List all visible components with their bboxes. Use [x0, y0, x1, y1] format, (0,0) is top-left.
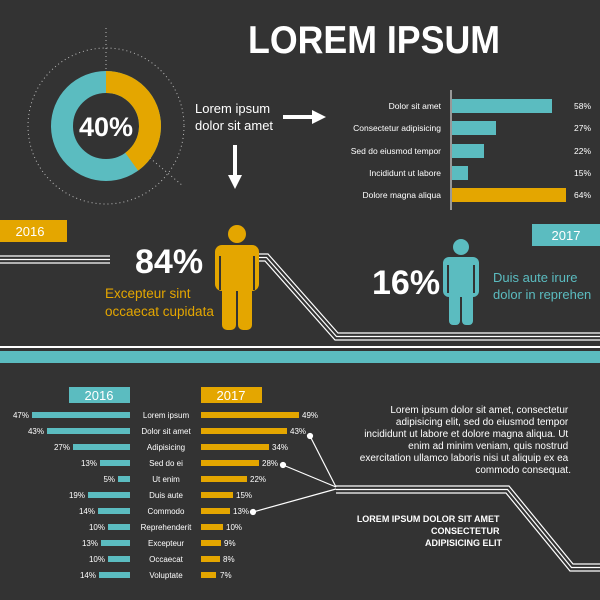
text: excepteur: Excepteur sint — [105, 286, 191, 301]
text: excepteur: occaecat cupidata — [105, 304, 214, 319]
comparison bar chart: Adipisicing — [147, 443, 185, 452]
bottom header 2016: 2016 — [85, 388, 113, 403]
divider band — [0, 346, 600, 348]
bottom header 2017 — [201, 387, 262, 403]
title: LOREM IPSUM — [248, 19, 500, 62]
comparison bar chart: 22% — [250, 475, 266, 484]
connector lines bottom — [336, 486, 600, 571]
comparison bar chart: 13% — [82, 539, 98, 548]
comparison bar chart: Commodo — [148, 507, 185, 516]
comparison bar chart: 9% — [224, 539, 236, 548]
top bar chart: Sed do eiusmod tempor — [351, 146, 441, 156]
bold caption: ADIPISICING ELIT — [425, 538, 502, 548]
comparison bar chart: Sed do ei — [149, 459, 183, 468]
tag 2016: 2016 — [16, 224, 44, 239]
comparison bar chart: Dolor sit amet — [141, 427, 191, 436]
icon: teal person — [443, 239, 479, 325]
comparison bar chart: 34% — [272, 443, 288, 452]
top bar chart: 22% — [574, 146, 591, 156]
top bar chart — [351, 90, 591, 210]
comparison bar chart: 7% — [220, 571, 232, 580]
comparison bar chart: 14% — [79, 507, 95, 516]
comparison bar chart: 14% — [80, 571, 96, 580]
text: duis aute: Duis aute irure — [493, 270, 578, 285]
donut chart 40%: 40% — [79, 112, 133, 142]
top bar chart: Consectetur adipisicing — [353, 123, 441, 133]
tag 2016 — [0, 220, 67, 242]
connector lines middle — [0, 254, 600, 340]
comparison bar chart: 8% — [223, 555, 235, 564]
comparison bar chart: 43% — [28, 427, 44, 436]
comparison bar chart: 13% — [233, 507, 249, 516]
arrow down — [228, 145, 242, 189]
tag 2017 — [532, 224, 600, 246]
text: lorem ipsum dolor: Lorem ipsum — [195, 101, 270, 116]
comparison bar chart: Occaecat — [149, 555, 184, 564]
tag 2017: 2017 — [552, 228, 580, 243]
stat 16%: 16% — [372, 264, 440, 302]
comparison bar chart: Reprehenderit — [141, 523, 192, 532]
top bar chart: Dolore magna aliqua — [363, 190, 441, 200]
donut chart 40% — [28, 28, 184, 204]
comparison bar chart: 47% — [13, 411, 29, 420]
stat 84%: 84% — [135, 243, 203, 281]
paragraph: incididunt ut labore et dolore magna aliqua. Ut — [364, 429, 568, 440]
top bar chart: Incididunt ut labore — [369, 168, 441, 178]
top bar chart: Dolor sit amet — [389, 101, 442, 111]
bottom header 2017: 2017 — [217, 388, 245, 403]
icon: orange person — [215, 225, 259, 330]
top bar chart: 58% — [574, 101, 591, 111]
comparison bar chart: Ut enim — [152, 475, 180, 484]
comparison bar chart: Lorem ipsum — [143, 411, 189, 420]
pointer lines — [250, 434, 336, 514]
comparison bar chart: 49% — [302, 411, 318, 420]
comparison bar chart: 43% — [290, 427, 306, 436]
comparison bar chart: Excepteur — [148, 539, 184, 548]
bold caption: LOREM IPSUM DOLOR SIT AMET — [357, 514, 500, 524]
bottom header 2016 — [69, 387, 130, 403]
paragraph: enim ad minim veniam, quis nostrud — [408, 441, 568, 452]
bold caption: CONSECTETUR — [431, 526, 500, 536]
text: duis aute: dolor in reprehen — [493, 287, 591, 302]
comparison bar chart: 10% — [89, 523, 105, 532]
paragraph: exercitation ullamco laboris nisi ut aliquip ex ea — [360, 453, 569, 464]
comparison bar chart: 28% — [262, 459, 278, 468]
text: lorem ipsum dolor: dolor sit amet — [195, 118, 273, 133]
comparison bar chart: 27% — [54, 443, 70, 452]
paragraph: Lorem ipsum dolor sit amet, consectetur — [390, 405, 569, 416]
comparison bar chart: 10% — [226, 523, 242, 532]
top bar chart: 64% — [574, 190, 591, 200]
comparison bar chart: 19% — [69, 491, 85, 500]
comparison bar chart: Voluptate — [149, 571, 183, 580]
comparison bar chart — [13, 411, 318, 580]
paragraph: adipisicing elit, sed do eiusmod tempor — [396, 417, 569, 428]
comparison bar chart: 15% — [236, 491, 252, 500]
comparison bar chart: 10% — [89, 555, 105, 564]
top bar chart: 27% — [574, 123, 591, 133]
paragraph: commodo consequat. — [475, 465, 571, 476]
comparison bar chart: 5% — [103, 475, 115, 484]
arrow right — [283, 110, 326, 124]
comparison bar chart: Duis aute — [149, 491, 183, 500]
top bar chart: 15% — [574, 168, 591, 178]
comparison bar chart: 13% — [81, 459, 97, 468]
